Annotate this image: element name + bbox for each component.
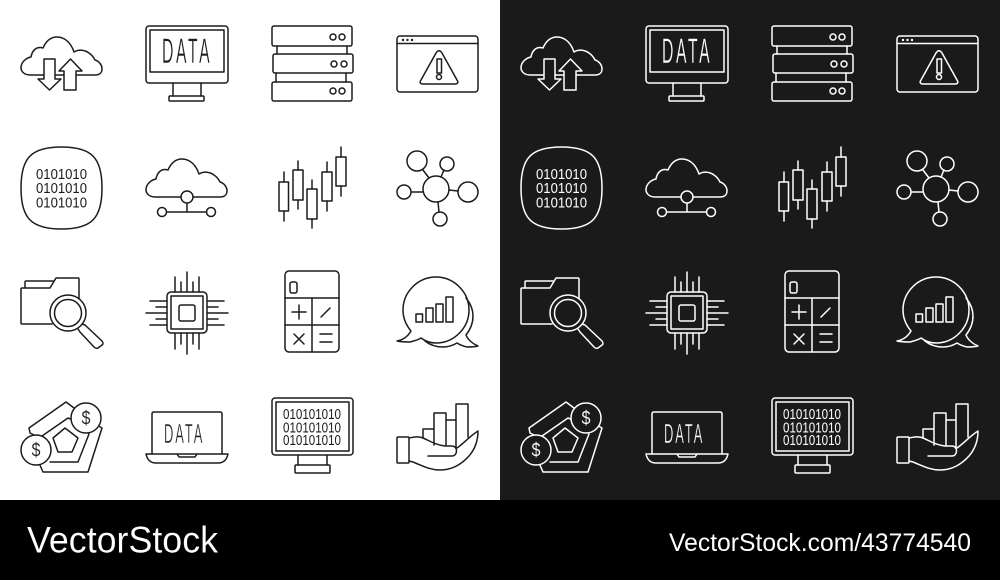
icon: monitor with binary code: 010101010 [783,407,841,423]
dark panel background [500,0,1000,500]
footer image id text: VectorStock.com/43774540 [669,529,971,557]
icon: binary code squircle: 0101010 [36,167,87,183]
icon: monitor with binary code: 010101010 [283,433,341,449]
light panel background [0,0,500,500]
icon: folder search [521,278,603,348]
icon: server rack [272,26,353,101]
icon: cloud network [646,159,727,216]
icon: binary code squircle [21,147,102,229]
icon: laptop with DATA [646,412,728,463]
icon: hub network nodes [897,151,978,226]
icon: hub network nodes [397,151,478,226]
icon: browser window warning [897,36,978,92]
icon: monitor with binary code [772,398,853,473]
icon: folder search [21,278,103,348]
icon: monitor with binary code: 010101010 [783,420,841,436]
icon: candlestick chart [279,147,346,228]
icon: binary code squircle: 0101010 [36,196,87,212]
icon: binary code squircle [521,147,602,229]
icon: candlestick chart [779,147,846,228]
icon: monitor with DATA [646,26,728,101]
icon: speech bubbles with bar chart [897,277,978,347]
panel: dark icon set [521,26,978,473]
icon: monitor with binary code: 010101010 [283,420,341,436]
icon: pentagon with dollar coins [521,402,602,472]
icon: processor chip [146,272,228,354]
icon: monitor with binary code: 010101010 [783,433,841,449]
footer bar [0,500,1000,580]
icon: binary code squircle: 0101010 [536,181,587,197]
icon: cloud upload download [21,37,102,90]
icon: monitor with binary code [272,398,353,473]
icon: binary code squircle: 0101010 [536,167,587,183]
icon: laptop with DATA: DATA [664,417,704,449]
icon: pentagon with dollar coins: $ [32,440,41,462]
icon: processor chip [646,272,728,354]
icon: cloud upload download [521,37,602,90]
icon: pentagon with dollar coins: $ [532,440,541,462]
icon: pentagon with dollar coins: $ [582,408,591,430]
icon: monitor with DATA: DATA [662,31,712,71]
icon: laptop with DATA: DATA [164,417,204,449]
icon: calculator [785,271,839,352]
icon: pentagon with dollar coins: $ [82,408,91,430]
icon: pentagon with dollar coins [21,402,102,472]
icon: server rack [772,26,853,101]
icon: calculator [285,271,339,352]
panel: light icon set [21,26,478,473]
icon: binary code squircle: 0101010 [36,181,87,197]
icon: speech bubbles with bar chart [397,277,478,347]
icon: laptop with DATA [146,412,228,463]
icon: binary code squircle: 0101010 [536,196,587,212]
footer logo text: VectorStock [27,520,218,560]
icon: monitor with binary code: 010101010 [283,407,341,423]
icon: monitor with DATA [146,26,228,101]
icon: browser window warning [397,36,478,92]
icon: hand holding bar chart [897,404,978,470]
icon: cloud network [146,159,227,216]
icon: monitor with DATA: DATA [162,31,212,71]
icon: hand holding bar chart [397,404,478,470]
